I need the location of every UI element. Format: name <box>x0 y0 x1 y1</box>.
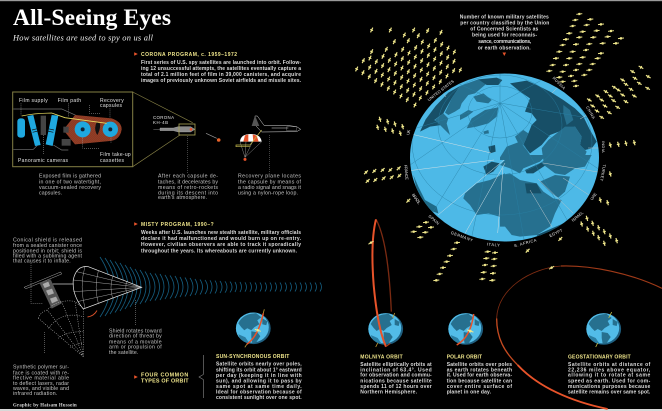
caption: conical shield: that causes it to inflate. <box>13 259 71 265</box>
satellites: spain, germany, italy, south africa, egypt, israel <box>411 215 619 282</box>
caption: conical shield: from a sealed canister once <box>13 243 82 249</box>
caption: exposed film: in one of two watertight, <box>39 179 101 185</box>
caption: exposed film <box>39 174 101 196</box>
caption: capsule detaches: during its descent into <box>158 190 218 196</box>
country labels <box>403 76 607 248</box>
intro text: number of known military satellites: Number of known military satellites <box>460 14 549 20</box>
orbit: molniya path <box>368 219 391 347</box>
panel: film capsule diagram: Recovery <box>100 98 124 104</box>
caption: recovery plane: using a nylon-rope loop. <box>238 190 298 196</box>
panel: film capsule diagram: Film supply <box>19 98 48 104</box>
panel: molniya orbit: MOLNIYA ORBIT <box>360 354 403 360</box>
panel: molniya orbit: for observation and commu- <box>360 373 432 379</box>
panel: sun-synchronous orbit: per day (keeping it in line with <box>216 373 302 379</box>
intro text: number of known military satellites <box>460 14 549 56</box>
panel: polar orbit: it. Used for earth observa- <box>447 373 512 379</box>
intro text: number of known military satellites: sance, communications, <box>478 39 532 45</box>
panel: misty program text: MISTY PROGRAM, 1990–? <box>141 222 214 228</box>
land: north america <box>420 78 502 153</box>
icon: falling capsule <box>206 133 220 142</box>
caption: exposed film: Exposed film is gathered <box>39 174 101 180</box>
panel: geostationary orbit: speed as earth. Used for com- <box>568 378 651 384</box>
panel: corona program text: total of 2.1 million feet of film in 39,000 canisters, and acquire <box>141 72 301 78</box>
country labels: UAE <box>589 191 598 201</box>
caption: capsule detaches: earth's atmosphere. <box>158 195 207 201</box>
caption: synthetic polymer: flective material able <box>13 376 69 382</box>
country labels: BRAZIL <box>411 192 422 206</box>
panel: geostationary orbit: GEOSTATIONARY ORBIT <box>568 354 631 360</box>
heading: four common types of orbit: FOUR COMMON <box>141 373 188 379</box>
caption: capsule detaches <box>158 174 218 201</box>
globe: molniya <box>367 313 403 347</box>
panel: geostationary orbit: allowing it to rotate at same <box>568 373 651 379</box>
signal waves <box>100 257 322 317</box>
caption: conical shield: filled with a subliming agent <box>13 254 83 260</box>
caption: capsule detaches: taches, it decelerates by <box>158 179 218 185</box>
caption: recovery plane: the capsule by means of <box>238 179 302 185</box>
panel: misty program text: However, civilian observers are able to track it sporadically <box>141 242 301 248</box>
panel: molniya orbit: nications because satellite <box>360 378 432 384</box>
panel: corona program text <box>134 52 302 84</box>
caption: capsule detaches: After each capsule de- <box>158 174 218 180</box>
satellites: india, turkey, uae <box>598 140 636 206</box>
caption: shield rotates: means of a movable <box>109 339 162 345</box>
panel: sun-synchronous orbit: same spot at same time daily. <box>216 384 302 390</box>
intro text: number of known military satellites: of Concerned Scientists as <box>470 27 539 33</box>
caption: shield rotates: arm or propulsion of <box>109 345 162 351</box>
panel: sun-synchronous orbit: sun), and allowing it to pass by <box>216 379 302 385</box>
panel: film capsule diagram: Film take-up <box>100 152 131 158</box>
caption: recovery plane <box>238 174 302 196</box>
subtitle: How satellites are used to spy on us all <box>12 34 154 42</box>
panel: molniya orbit: spends 11 of 12 hours over <box>360 384 432 390</box>
satellites: uk, france, brazil <box>363 116 411 204</box>
brace <box>199 355 203 398</box>
country labels: EGYPT <box>548 227 564 238</box>
caption: conical shield <box>13 238 83 265</box>
panel: sun-synchronous orbit: Satellite orbits nearly over poles, <box>216 362 302 368</box>
panel: corona program text: images of previously unknown Soviet airfields and missile sites. <box>141 78 302 84</box>
panel: misty program text: declare it had malfunctioned and would burn up on re-entry. <box>141 236 302 242</box>
caption: synthetic polymer: to deflect lasers, radar <box>13 381 69 387</box>
land: west africa and south america <box>413 162 505 218</box>
globe <box>410 74 599 242</box>
panel: polar orbit: cover entire surface of <box>447 384 512 390</box>
globe: sun-synchronous <box>235 309 271 347</box>
illustration: conical shield and satellite <box>24 266 142 357</box>
leader lines <box>31 263 135 354</box>
satellites: china <box>586 65 651 120</box>
caption: shield rotates: direction of threat by <box>109 334 162 340</box>
caption: recovery plane: a radio signal and snags it <box>238 185 302 191</box>
caption: shield rotates: the satellite. <box>109 350 138 356</box>
panel: misty program text <box>134 222 302 254</box>
panel: sun-synchronous orbit: SUN-SYNCHRONOUS ORBIT <box>216 354 289 360</box>
panel: molniya orbit: inclination of 63.4°. Used <box>360 367 432 373</box>
orbit: geostationary path <box>497 265 662 409</box>
country labels: TURKEY <box>599 164 607 182</box>
illustration: corona KH-4B satellite <box>153 124 195 173</box>
panel: corona program text: CORONA PROGRAM, c. 1959–1972 <box>141 52 237 58</box>
caption: synthetic polymer: infrared radiation. <box>13 391 57 397</box>
panel: geostationary orbit: munications purposes because <box>568 384 651 390</box>
panel: film capsule diagram: Film path <box>58 98 81 104</box>
caption: conical shield: Conical shield is released <box>13 238 82 244</box>
panel: corona program text: ing 12 unsuccessful attempts, the satellites eventually capture a <box>141 66 301 72</box>
intro text: number of known military satellites: being used for reconnais- <box>472 33 537 39</box>
country labels: FRANCE <box>403 165 410 180</box>
panel: polar orbit: planet in one day. <box>447 390 492 396</box>
country labels: SPAIN <box>427 214 441 226</box>
pointer lines <box>407 88 600 237</box>
panel: misty program text: Weeks after U.S. launches new stealth satellite, military officials <box>141 230 301 236</box>
panel: polar orbit: as earth rotates beneath <box>447 367 512 373</box>
panel: molniya orbit: Satellite elliptically orbits at <box>360 362 432 368</box>
panel: globe with satellite counts <box>354 13 651 282</box>
country labels: CHINA <box>585 105 597 120</box>
globe: polar <box>447 313 483 345</box>
caption: exposed film: vacuum-sealed recovery <box>39 185 101 191</box>
panel: geostationary orbit: 22,236 miles above equator, <box>568 367 651 373</box>
heading: four common types of orbit <box>134 373 189 384</box>
panel: film capsule diagram <box>13 92 193 167</box>
country labels: UNITED STATES <box>427 78 455 102</box>
caption: synthetic polymer: Synthetic polymer sur- <box>13 365 69 371</box>
intro text: number of known military satellites: per country classified by the Union <box>460 20 549 26</box>
satellites: united states <box>354 27 463 108</box>
label: corona KH-4B <box>153 115 174 125</box>
panel: film capsule diagram: capsules <box>100 103 122 109</box>
panel: polar orbit: POLAR ORBIT <box>447 354 482 360</box>
label: corona KH-4B: KH-4B <box>153 120 168 125</box>
panel: geostationary orbit <box>568 312 651 396</box>
land: russia and asia <box>500 81 597 160</box>
illustration: recovery plane and parachute <box>236 115 301 173</box>
caption: exposed film: capsules. <box>39 190 62 196</box>
panel: film capsule diagram: cassettes <box>100 158 124 164</box>
arrow: shield rotation <box>88 310 97 317</box>
panel: molniya orbit: Northern Hemisphere. <box>360 390 418 396</box>
caption: synthetic polymer: waves, and visible and <box>13 386 69 392</box>
panel: polar orbit: Satellite orbits over poles <box>447 362 512 368</box>
globe: geostationary <box>585 312 621 347</box>
panel: corona program text: First series of U.S. spy satellites are launched into orbit. Follow- <box>141 60 301 66</box>
title: All-Seeing Eyes <box>13 5 171 31</box>
country labels: ISRAEL <box>570 209 585 223</box>
country labels: UK <box>405 129 411 135</box>
panel: sun-synchronous orbit <box>216 309 302 401</box>
panel: sun-synchronous orbit: shifting its orbit about 1° eastward <box>216 367 302 373</box>
panel: polar orbit <box>447 313 512 396</box>
panel: film capsule diagram: Panoramic cameras <box>18 158 68 164</box>
panel: sun-synchronous orbit: Ideal for observation because of <box>216 390 302 396</box>
panel: molniya orbit <box>360 219 432 396</box>
caption: shield rotates <box>109 328 162 356</box>
panel: polar orbit: tion because satellite can <box>447 378 512 384</box>
country labels: ITALY <box>487 242 500 248</box>
caption: synthetic polymer: face is coated with re- <box>13 370 69 376</box>
land: africa and middle east <box>500 155 592 238</box>
panel: geostationary orbit: satellite remains over same spot. <box>568 390 651 396</box>
panel: sun-synchronous orbit: consistent sunlight over one spot. <box>216 395 302 401</box>
country labels: S. AFRICA <box>513 237 537 248</box>
country labels: GERMANY <box>450 230 474 243</box>
panel: misty program text: throughout the years. Its whereabouts are currently unknown. <box>141 248 298 254</box>
intro text: number of known military satellites: or earth observation. <box>478 45 531 51</box>
caption: shield rotates: Shield rotates toward <box>109 328 162 334</box>
caption: conical shield: positioned in orbit; shield is <box>13 248 82 254</box>
country labels: INDIA <box>601 141 606 153</box>
credit: Graphic by Haisam Hussein <box>13 404 77 409</box>
panel: geostationary orbit: Satellite orbits at distance of <box>568 362 651 368</box>
label: corona KH-4B: CORONA <box>153 115 174 120</box>
caption: synthetic polymer <box>13 365 69 397</box>
country labels: RUSSIA <box>552 76 567 91</box>
satellites: russia <box>546 13 624 87</box>
caption: recovery plane: Recovery plane locates <box>238 174 301 180</box>
heading: four common types of orbit: TYPES OF ORBIT <box>141 378 189 384</box>
caption: capsule detaches: means of retro-rockets <box>158 185 218 191</box>
